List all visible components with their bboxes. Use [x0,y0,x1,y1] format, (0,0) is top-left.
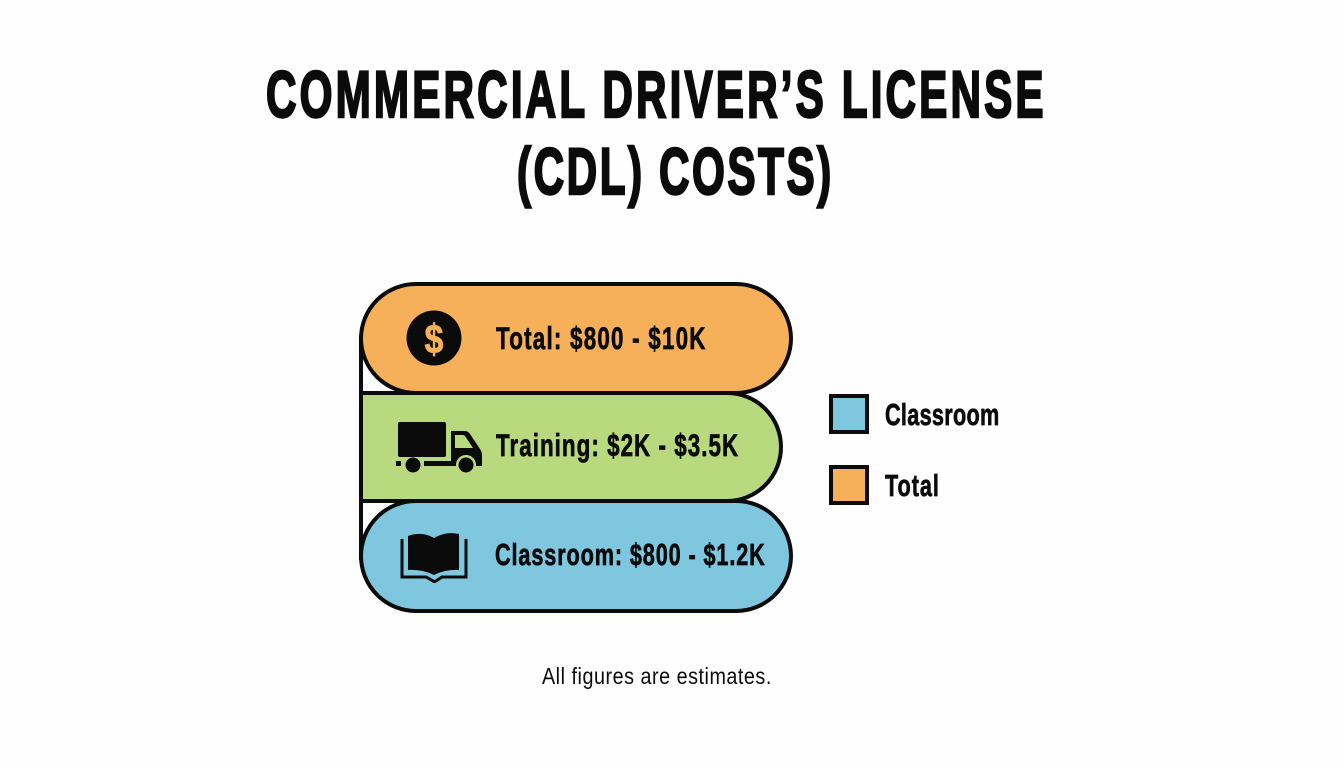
icon: dollar coin [406,310,462,366]
legend item: total [831,467,939,503]
label: training cost: Training: $2K - $3.5K [496,427,738,463]
bar: total [361,284,791,393]
title [266,57,1044,208]
label: classroom cost: Classroom: $800 - $1.2K [495,537,765,572]
legend [831,396,999,503]
icon: open book [402,533,466,582]
legend item: classroom [831,396,999,432]
icon: dollar coin: $ [425,316,443,362]
title: (CDL) COSTS) [517,134,831,208]
bar: training [361,393,781,501]
bar: classroom [361,501,791,611]
icon: truck [396,422,482,472]
label: total cost: Total: $800 - $10K [496,320,706,356]
stacked cost chart [361,284,791,611]
left vertical spine [359,335,363,560]
legend item: total: Total [885,468,939,503]
title: COMMERCIAL DRIVER’S LICENSE [266,57,1044,131]
footnote: All figures are estimates. [542,662,771,689]
legend item: classroom: Classroom [885,397,999,432]
